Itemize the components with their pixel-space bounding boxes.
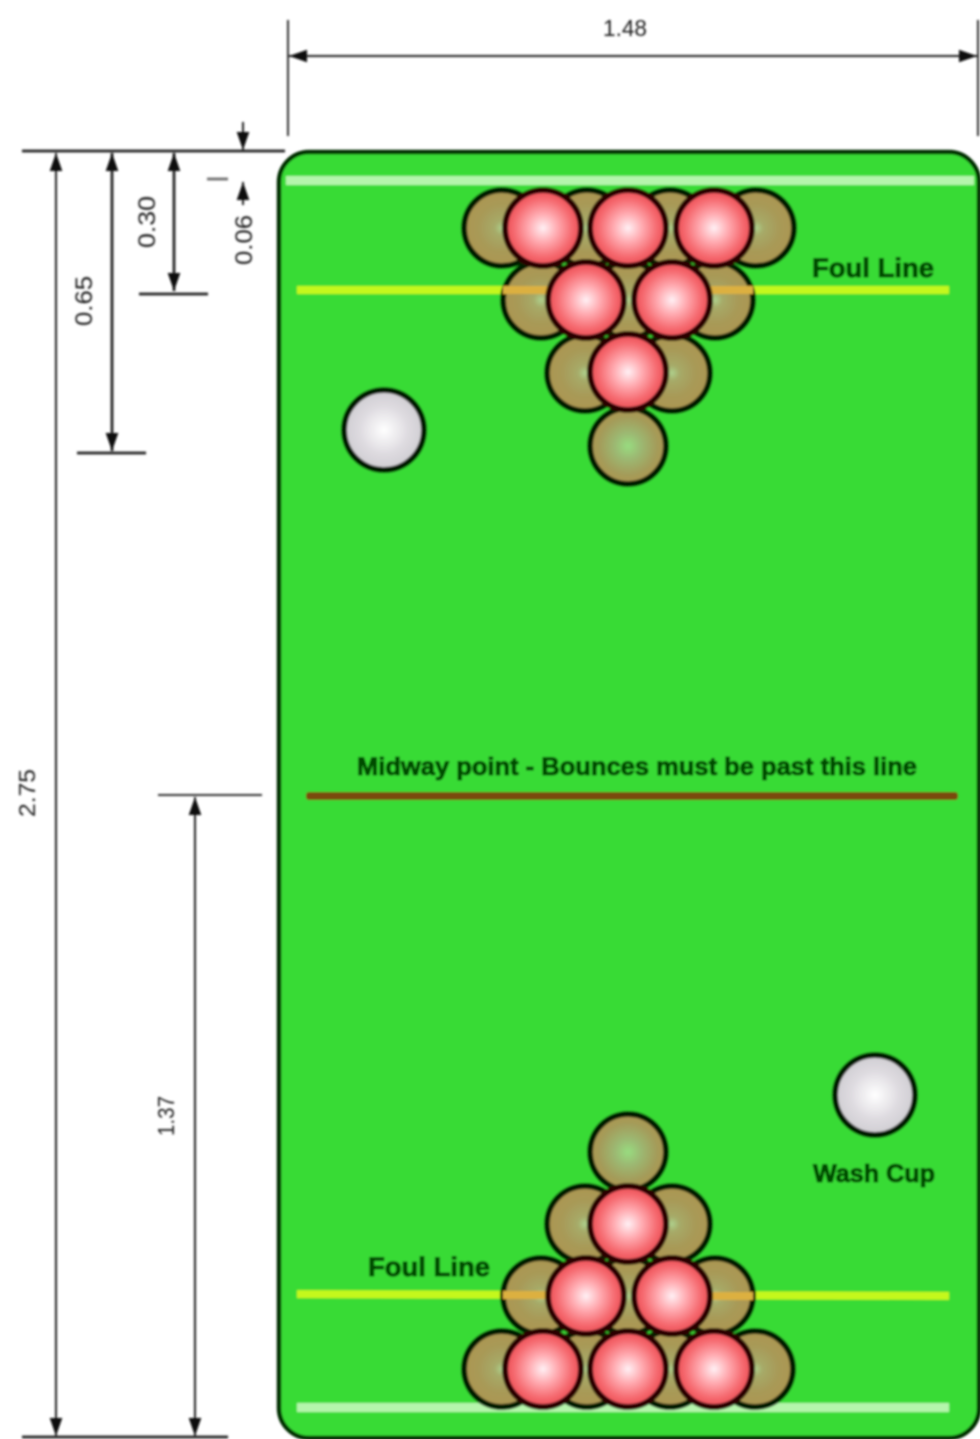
bottom white line — [297, 1403, 949, 1412]
bottom foul line — [297, 1290, 949, 1300]
bottom red cups — [505, 1186, 752, 1407]
wash cup top — [344, 390, 424, 470]
dimension: 0.30: 0.30 — [134, 196, 161, 248]
dimension baseline top — [22, 150, 285, 152]
top olive cups — [464, 190, 794, 484]
label: wash cup: Wash Cup — [813, 1160, 935, 1188]
top foul line overlay on cups — [503, 286, 753, 294]
dimension baseline bottom — [22, 1436, 228, 1438]
panel: green table — [279, 152, 979, 1438]
midway line — [306, 792, 958, 800]
top red cups — [505, 190, 752, 410]
wash cup bottom — [835, 1055, 915, 1135]
dimension: 0.06: 0.06 — [231, 215, 258, 265]
dimension: 0.65: 0.65 — [71, 276, 98, 326]
dimension: width 1.48: 1.48 — [603, 15, 647, 41]
label: midway point: Midway point - Bounces must be past this line — [357, 753, 917, 781]
top foul line — [297, 286, 949, 294]
bottom tip cup — [590, 1114, 666, 1190]
label: foul line top: Foul Line — [812, 253, 934, 283]
dimension: 1.37: 1.37 — [153, 1096, 179, 1136]
label: foul line bottom: Foul Line — [368, 1252, 490, 1282]
top white line — [286, 176, 974, 185]
dimension: length 2.75: 2.75 — [14, 769, 40, 817]
bottom foul line overlay on cups — [503, 1291, 753, 1300]
top tip cup — [590, 408, 666, 484]
bottom olive cups — [464, 1114, 793, 1407]
